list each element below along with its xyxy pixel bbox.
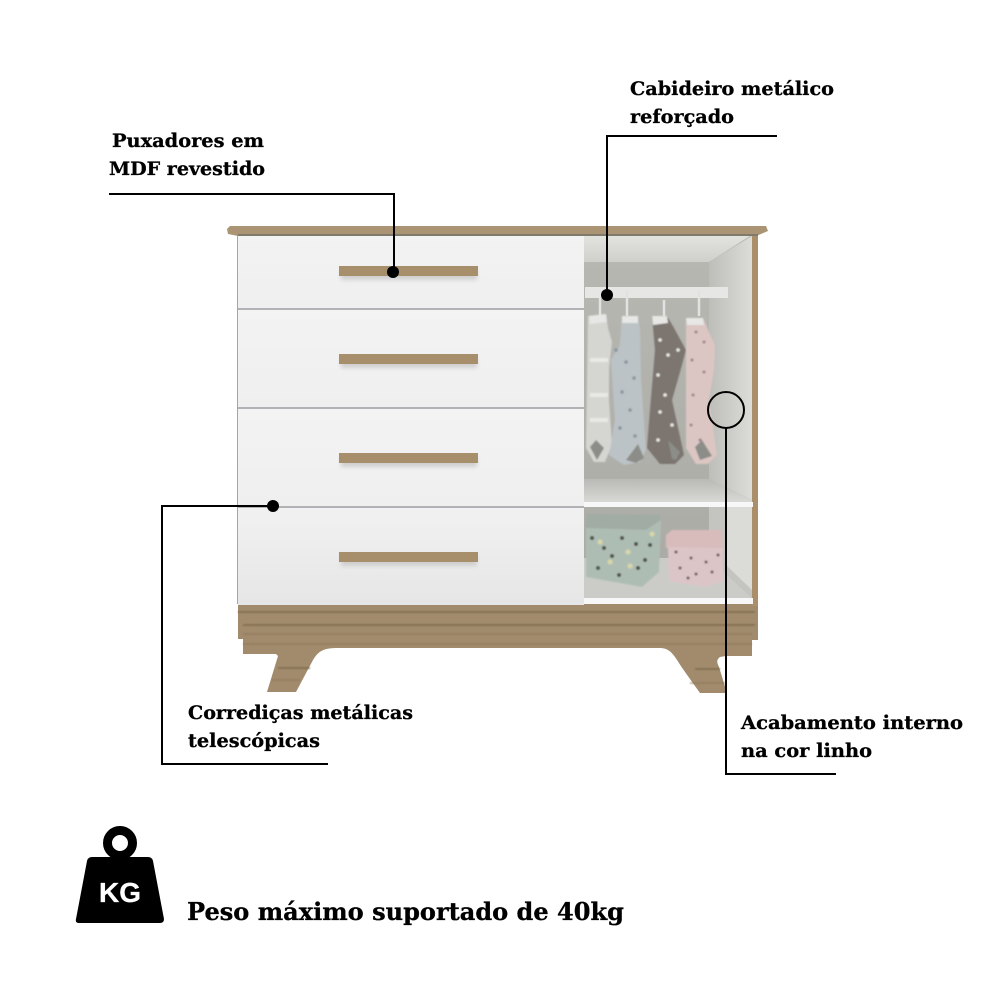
drawer front 4 [238,508,584,605]
callout: acabamento: na cor linho [741,740,872,762]
pink storage box [666,530,723,587]
drawer front 3 [238,409,584,506]
garment patterns [616,350,635,436]
callout: cabideiro: reforçado [630,106,734,128]
interior right side [709,236,752,500]
garment 3 [647,316,686,464]
handle shadows [341,270,477,566]
weight capacity text: Peso máximo suportado de 40kg [187,897,624,926]
garment leg openings [590,440,712,463]
callout: cabideiro [601,78,834,301]
furniture: dresser [227,226,768,693]
garment 4 [686,318,717,464]
callout: corrediças [162,500,413,764]
icon: kg weight: KG [99,877,141,908]
callout: puxadores [109,130,399,278]
callout: puxadores: Puxadores em [112,130,264,152]
callout: acabamento: Acabamento interno [740,712,963,734]
callout: corrediças: Corrediças metálicas [188,702,413,724]
drawer front 1 [238,235,584,308]
wood base with legs [238,604,758,693]
top board [227,226,768,236]
callout: corrediças: telescópicas [188,730,320,752]
callout: cabideiro: Cabideiro metálico [630,78,834,100]
right side wood panel [752,234,758,606]
green storage box [586,514,661,587]
drawer front 2 [238,310,584,407]
baby clothes [586,314,717,465]
garment 2 [609,316,646,465]
upper shelf [584,479,753,507]
hanging rail [585,287,728,316]
handles [339,266,478,562]
interior ceiling [584,234,753,262]
interior back [584,234,752,604]
lower right side [709,507,752,598]
lower shelf [584,558,753,604]
garment 1 [586,314,612,462]
callout: acabamento [708,392,963,774]
callout: puxadores: MDF revestido [109,158,265,180]
icon: kg weight [76,830,164,923]
